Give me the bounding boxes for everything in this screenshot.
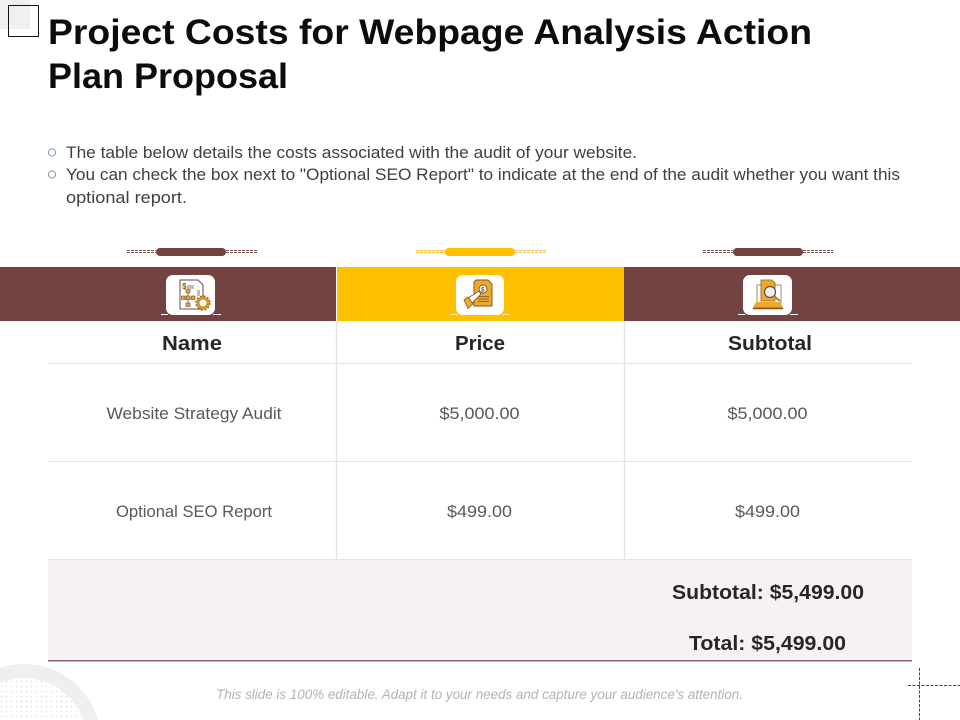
subtotal amount: Subtotal: $5,499.00 — [672, 581, 864, 604]
column headings: Price — [455, 332, 505, 355]
decorative crosshair — [908, 668, 960, 720]
footer note: This slide is 100% editable. Adapt it to your needs and capture your audience's attention. — [216, 687, 743, 702]
row: optional SEO report — [116, 503, 800, 521]
column headings: Name — [162, 332, 222, 355]
table grid lines — [48, 321, 912, 560]
icon: process document with gear — [161, 275, 221, 315]
title: Plan Proposal — [48, 56, 288, 96]
icon: process document with gear: $ — [182, 282, 187, 291]
intro bullet list: You can check the box next to "Optional SEO Report" to indicate at the end of the audit whether you want this — [66, 166, 900, 184]
row: website strategy audit: Website Strategy Audit — [106, 405, 282, 423]
icon: hand holding price document: $ — [481, 286, 485, 294]
row: optional SEO report: $499.00 — [447, 503, 512, 521]
row: website strategy audit: $5,000.00 — [728, 405, 808, 423]
decorative ring with dots — [0, 664, 98, 720]
decorative corner square — [0, 0, 38, 36]
table header band — [0, 267, 960, 321]
row: optional SEO report: Optional SEO Report — [116, 503, 272, 521]
total amount: Total: $5,499.00 — [689, 632, 846, 655]
row: website strategy audit: $5,000.00 — [440, 405, 520, 423]
pill connector: name column — [127, 248, 257, 256]
icon: laptop with magnifier — [738, 275, 798, 315]
intro bullet list: optional report. — [66, 189, 187, 207]
icon: hand holding price document — [450, 275, 510, 315]
column headings — [162, 332, 812, 355]
row: optional SEO report: $499.00 — [735, 503, 800, 521]
pill connector: subtotal column — [703, 248, 833, 256]
intro bullet list — [48, 144, 900, 207]
pill connector: price column — [416, 248, 546, 256]
totals panel — [48, 560, 912, 662]
title: Project Costs for Webpage Analysis Action — [48, 12, 812, 52]
row: website strategy audit — [106, 405, 808, 423]
title — [48, 12, 812, 96]
column headings: Subtotal — [728, 332, 812, 355]
intro bullet list: The table below details the costs associated with the audit of your website. — [66, 144, 637, 162]
